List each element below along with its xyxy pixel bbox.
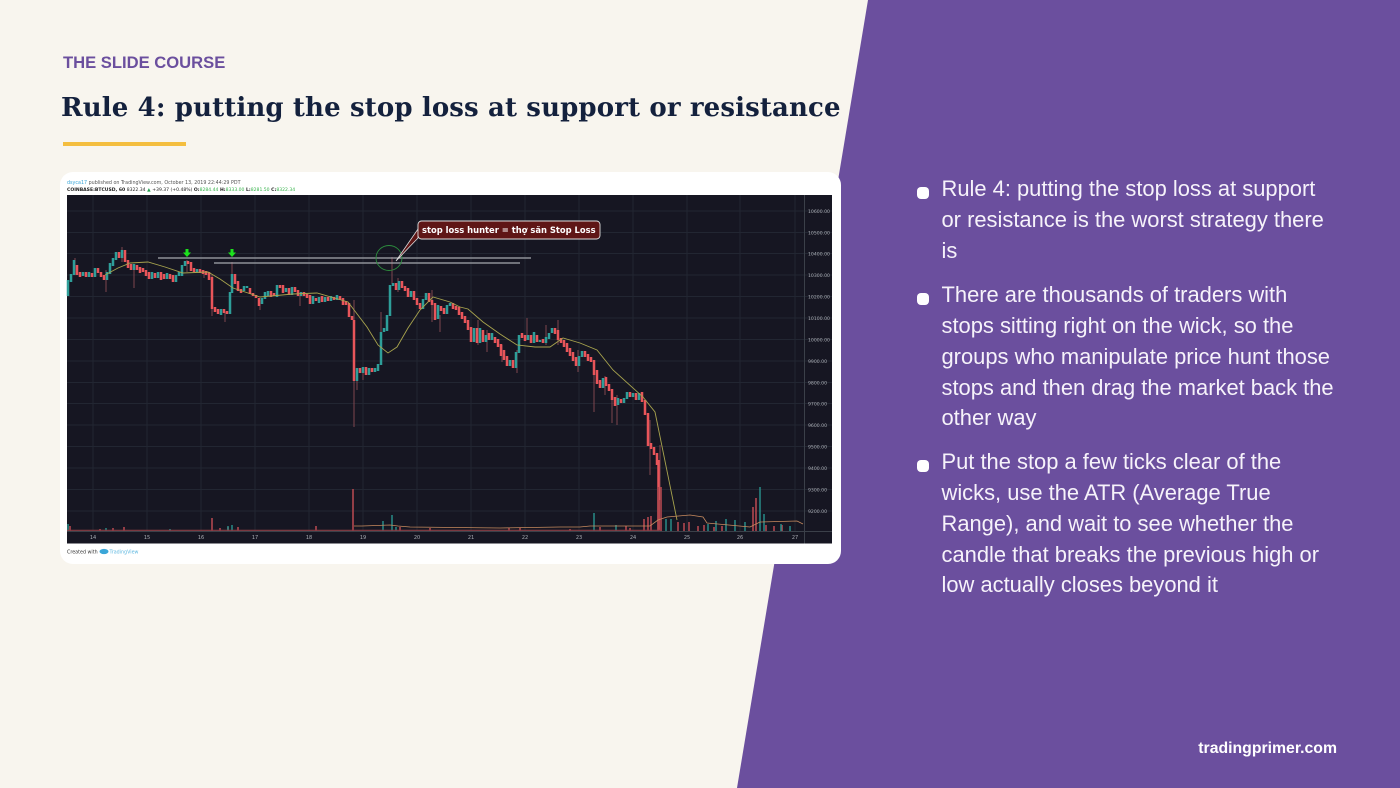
date axis labels: 19 — [360, 535, 366, 541]
kicker: the slide course: THE SLIDE COURSE — [63, 53, 225, 72]
price axis labels — [808, 209, 830, 515]
bullet: stop hunting: stops and then drag the market back the — [942, 375, 1334, 400]
date axis labels: 18 — [306, 535, 312, 541]
bullet: where to put the stop — [917, 449, 1319, 597]
bullet: stop hunting: groups who manipulate price hunt those — [942, 344, 1330, 369]
price axis labels: 10200.00 — [808, 294, 830, 300]
footer: site name: tradingprimer.com — [1198, 740, 1337, 757]
bullet: stop hunting: There are thousands of traders with — [942, 282, 1287, 307]
bullet: where to put the stop: Range), and wait to see whether the — [942, 511, 1293, 536]
bullet: stop hunting: stops sitting right on the wick, so the — [942, 313, 1293, 338]
bullet: worst strategy — [917, 176, 1324, 263]
date axis labels: 16 — [198, 535, 204, 541]
bullet: where to put the stop: Put the stop a few ticks clear of the — [942, 449, 1281, 474]
created with tradingview credit — [67, 549, 139, 556]
date axis labels: 14 — [90, 535, 96, 541]
price axis labels: 10500.00 — [808, 230, 830, 236]
date axis labels: 26 — [737, 535, 743, 541]
created with tradingview credit: Created with — [67, 550, 98, 556]
price axis labels: 10300.00 — [808, 273, 830, 279]
chart plot area — [67, 195, 832, 544]
date axis labels: 23 — [576, 535, 582, 541]
date axis labels: 27 — [792, 535, 798, 541]
date axis labels: 17 — [252, 535, 258, 541]
date axis labels: 25 — [684, 535, 690, 541]
volume bars — [70, 487, 782, 531]
title: Rule 4: putting the stop loss at support or resistance — [61, 93, 841, 123]
price axis labels: 9900.00 — [808, 359, 827, 365]
price axis labels: 9600.00 — [808, 423, 827, 429]
date axis labels: 24 — [630, 535, 636, 541]
bullet: where to put the stop: wicks, use the ATR (Average True — [942, 480, 1271, 505]
chart header text: dsyca17 published on TradingView.com, October 13, 2019 22:44:29 PDT — [67, 180, 241, 186]
price axis labels: 10400.00 — [808, 252, 830, 258]
stop hunt circle — [376, 246, 402, 270]
bullet: worst strategy: is — [942, 238, 957, 263]
callout: stop loss hunter: stop loss hunter = thợ săn Stop Loss — [422, 225, 596, 235]
red candles — [77, 250, 658, 530]
chart header text: COINBASE:BTCUSD, 60 8322.34 ▲ +39.37 (+0.48%) O:8284.44 H:8333.00 L:8281.50 C:8322.34 — [67, 187, 295, 193]
price axis labels: 9700.00 — [808, 402, 827, 408]
date axis labels: 15 — [144, 535, 150, 541]
price axis labels: 10600.00 — [808, 209, 830, 215]
price axis labels: 9400.00 — [808, 466, 827, 472]
date axis labels: 22 — [522, 535, 528, 541]
chart header text — [67, 180, 295, 193]
bullet: worst strategy: Rule 4: putting the stop loss at support — [942, 176, 1315, 201]
candle wicks — [75, 247, 660, 500]
accent underline — [63, 142, 186, 146]
price axis labels: 10000.00 — [808, 338, 830, 344]
bullet: where to put the stop: low actually closes beyond it — [942, 572, 1218, 597]
bullet: stop hunting: other way — [942, 405, 1036, 430]
date axis labels: 21 — [468, 535, 474, 541]
price axis labels: 9300.00 — [808, 488, 827, 494]
icon: green down arrows — [183, 249, 236, 257]
created with tradingview credit: TradingView — [108, 550, 139, 556]
date axis labels — [90, 535, 798, 541]
teal candles — [68, 250, 639, 405]
price axis labels: 9500.00 — [808, 444, 827, 450]
price axis labels: 10100.00 — [808, 316, 830, 322]
date axis labels: 20 — [414, 535, 420, 541]
price axis labels: 9800.00 — [808, 380, 827, 386]
moving average line — [105, 262, 677, 520]
callout: stop loss hunter — [396, 221, 600, 261]
bullet: where to put the stop: candle that breaks the previous high or — [942, 542, 1319, 567]
price axis labels: 9200.00 — [808, 509, 827, 515]
support and resistance lines — [158, 258, 531, 263]
panel: chart screenshot card — [60, 172, 841, 564]
bullet: stop hunting — [917, 282, 1334, 430]
bullet: worst strategy: or resistance is the worst strategy there — [942, 207, 1324, 232]
volume average line — [354, 515, 803, 528]
